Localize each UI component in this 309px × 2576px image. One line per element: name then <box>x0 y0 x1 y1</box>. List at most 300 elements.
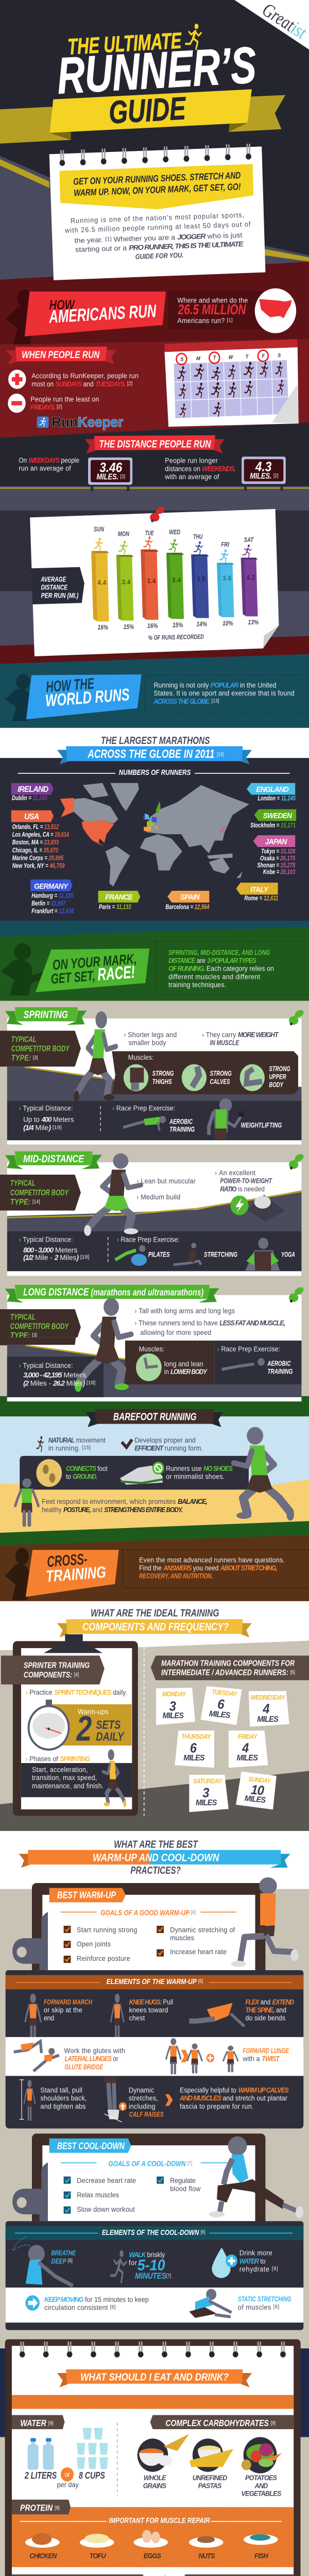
panel: protein: CHICKEN <box>29 2552 57 2560</box>
intro text: Running is one of the nation’s most popular sports, <box>71 211 244 225</box>
tag: France: FRANCE <box>105 893 133 902</box>
text: warm-up item text: end <box>44 2014 54 2022</box>
sticky note: Saturday: MILES <box>196 1799 217 1807</box>
panel: posture and calf raises: fascia to prepare for run. <box>180 2103 253 2110</box>
sticky note: Sunday: SUNDAY <box>248 1775 271 1785</box>
row: keep moving and stretching: circulation consistent <box>44 2303 108 2312</box>
tag: Ireland: IRELAND <box>18 785 48 794</box>
icon: green pin <box>289 1286 305 1302</box>
row: keep moving and stretching: STATIC STRETCHING <box>238 2295 291 2303</box>
item: breathe deep: [8] <box>68 2258 73 2264</box>
callout: 26.5 million: Americans run? <box>177 316 225 325</box>
sticky note: Sunday <box>236 1772 277 1809</box>
tag: Germany: Hamburg = 11,185 <box>31 892 74 900</box>
ribbon: Mid-distance <box>5 1151 102 1169</box>
panel: connects to ground: Runners use NO SHOES <box>166 1464 233 1472</box>
text: warm-up item text: knees toward <box>129 2006 168 2014</box>
text: mid-distance traits: RATIO is needed <box>220 1185 265 1193</box>
heading banner: On Your Mark <box>36 948 149 992</box>
ribbon: Guide <box>0 89 285 144</box>
panel: water: 2 LITERS <box>24 2470 57 2481</box>
panel: muscles: STRONG <box>152 1070 174 1077</box>
text: race prep <box>217 1345 293 1376</box>
silhouette: American runner <box>6 290 47 344</box>
tag: Ireland: Dublin = 11,245 <box>12 794 47 802</box>
tag: France: Paris = 31,133 <box>99 903 131 910</box>
text: weekends <box>164 456 235 481</box>
bar: Sunday: 16% <box>97 624 108 631</box>
section: running categories <box>0 1007 305 1346</box>
text: least popular day <box>30 395 99 411</box>
icon: green pin <box>289 1153 305 1170</box>
text: warm-up item text <box>44 2006 286 2022</box>
calendar <box>165 339 299 427</box>
panel: phases list: transition, max speed, <box>32 1774 97 1782</box>
tag: axis label <box>31 567 84 604</box>
sticky note: Wednesday <box>249 1691 289 1727</box>
section: warm-up and cool-down details <box>5 2003 303 2351</box>
heading banner: How The World Runs: WORLD RUNS <box>45 685 130 710</box>
clipboard: best cool-down <box>12 2133 265 2228</box>
text: sprint distance: (1/4 Mile) <box>23 1124 50 1132</box>
ribbon: Guide: GUIDE <box>108 90 187 130</box>
heading: numbers of runners: NUMBERS OF RUNNERS <box>119 768 191 777</box>
text: least popular day: People run the least on <box>30 395 99 403</box>
panel: complex carbohydrates: GRAINS <box>143 2482 166 2490</box>
bar: Tuesday: 16% <box>147 622 158 630</box>
panel: protein: NUTS <box>198 2552 215 2560</box>
callout: running types: SPRINTING, MID-DISTANCE, AND LONG <box>168 948 270 957</box>
tag: Italy: Rome = 12,611 <box>244 894 278 902</box>
text: sprint distance: [19] <box>53 1125 62 1130</box>
heading: goals of cool-down: GOALS OF A COOL-DOWN <box>108 2160 199 2168</box>
sticky note: Tuesday: 6 <box>217 1697 225 1712</box>
text: mid-distance range: › Typical Distance: <box>19 1235 73 1244</box>
panel: complex carbohydrates: VEGETABLES <box>242 2489 281 2498</box>
text: warm-up item text: THE SPINE, and <box>245 2006 286 2014</box>
panel: water: 8 CUPS <box>79 2470 105 2481</box>
text: natural movement: in running. <box>48 1444 80 1452</box>
figure: cool-down stretch <box>209 2137 303 2218</box>
callout: world intro: ACROSS THE GLOBE. <box>153 697 210 705</box>
icon: stopwatch <box>28 1700 69 1750</box>
panel: water: or <box>65 2470 71 2479</box>
figure: mid-distance runner <box>84 1154 141 1236</box>
tag: competitor body type: TYPICAL <box>10 1313 36 1322</box>
text: weekends: People run longer <box>165 456 218 465</box>
heading: warm-up and cool-down: PRACTICES? <box>130 1865 181 1876</box>
sticky note: Tuesday: TUESDAY <box>212 1688 238 1698</box>
ribbon: components and frequency <box>57 1619 252 1637</box>
sticky note: Thursday: 6 <box>190 1741 197 1756</box>
tag: competitor body type <box>0 1309 81 1345</box>
tag: England <box>247 783 296 802</box>
tag: Germany: Frankfurt = 12,438 <box>31 907 74 915</box>
panel: posture and calf raises: Especially helpful to WARM UP CALVES <box>180 2086 289 2094</box>
item: walk briskly: [7] <box>166 2273 171 2279</box>
text: running form: EFFICIENT running form. <box>134 1444 203 1452</box>
bar: Friday: 10% <box>222 619 233 627</box>
panel: glutes and lunge: GLUTE BRIDGE <box>65 2063 104 2071</box>
calendar: T <box>246 354 249 360</box>
calendar: T <box>213 355 217 361</box>
checklist: cool-down goals: blood flow <box>170 2184 201 2193</box>
figure: sprinter woman <box>103 1749 126 1807</box>
bar: Thursday <box>191 533 209 628</box>
bar: Sunday: SUN <box>94 526 104 533</box>
callout: running types: DISTANCE are 3 POPULAR TYPES <box>168 957 256 964</box>
bar: Thursday: 14% <box>197 620 207 628</box>
panel: muscles: STRONG <box>269 1064 290 1073</box>
panel: glutes and lunge: FORWARD LUNGE <box>243 2047 289 2055</box>
callout: running types <box>156 941 309 994</box>
text: distance range: › Typical Distance: <box>19 1362 73 1369</box>
text: distance range: (2 Miles - 26.2 Miles) <box>23 1379 84 1387</box>
panel: elements of the cool-down: ELEMENTS OF THE COOL-DOWN <box>102 2229 216 2237</box>
tag: competitor body type: COMPETITOR BODY <box>11 1044 70 1054</box>
panel: posture and calf raises <box>6 2076 303 2128</box>
heading banner: Cross-Training <box>26 1550 119 1597</box>
text: most popular days: [2] <box>127 381 132 387</box>
sticky note: Monday: MONDAY <box>162 1690 186 1698</box>
callout: world intro: States. It is one sport and exercise that is found <box>153 689 295 697</box>
panel: phases list: Start, acceleration, <box>32 1766 88 1774</box>
callout: 26.5 million <box>168 292 261 329</box>
sign: 3.46 miles: 3.46 <box>99 461 122 475</box>
heading banner: On Your Mark: ON YOUR MARK, <box>52 951 137 973</box>
section: when and how far Americans run <box>6 339 299 656</box>
callout: 26.5 million: [1] <box>227 317 233 323</box>
tag: competitor body type <box>0 1031 81 1066</box>
panel: muscles: STRONG <box>210 1070 232 1077</box>
checklist: warm-up goals: Dynamic stretching of <box>170 1926 235 1934</box>
text: race prep: › Race Prep Exercise: <box>217 1345 280 1353</box>
text: most popular days: most on SUNDAYS and TUESDAYS. <box>31 380 127 388</box>
heading: warm-up and cool-down: WARM-UP AND COOL-DOWN <box>93 1852 219 1864</box>
item: walk briskly: WALK briskly <box>129 2250 165 2259</box>
checklist: warm-up goals: Open joints <box>77 1940 111 1948</box>
panel: warm-ups daily: SETS <box>96 1718 121 1732</box>
intro text: the year. <box>74 236 99 245</box>
panel: phases list <box>21 1763 132 1797</box>
panel: long distance details <box>0 1298 301 1401</box>
callout: running types: different muscles and different <box>168 973 260 980</box>
sticky note: Saturday: SATURDAY <box>193 1777 222 1785</box>
tag: Germany: GERMANY <box>34 882 68 891</box>
heading banner: How The World Runs: HOW THE <box>45 675 95 696</box>
text: warm-up item text: do side bends <box>245 2014 285 2022</box>
panel: complex carbohydrates <box>138 2415 294 2498</box>
tag: competitor body type: TYPE: <box>10 1331 32 1340</box>
ribbon: Barefoot Running: BAREFOOT RUNNING <box>113 1412 197 1423</box>
sign: 4.3 miles: 4.3 <box>255 460 272 474</box>
ribbon: The Distance People Run: THE DISTANCE PEOPLE RUN <box>99 438 211 450</box>
bar: Saturday: SAT <box>244 536 254 544</box>
text: sprinter traits: › They carry MORE WEIGHT <box>202 1031 279 1039</box>
text: distance range: 3,000 - 42,195 Meters <box>23 1371 87 1379</box>
intro banner: GET ON YOUR RUNNING SHOES. STRETCH AND <box>73 170 241 187</box>
row: keep moving and stretching: KEEP MOVING for 15 minutes to keep <box>44 2295 149 2303</box>
ribbon: Long distance <box>5 1285 219 1302</box>
checklist: cool-down goals: Relax muscles <box>77 2191 119 2199</box>
text: mid-distance traits: › An excellent <box>215 1168 255 1177</box>
heading: warm-up and cool-down <box>19 1839 290 1876</box>
text: balance: healthy POSTURE, and STRENGTHENS ENTIRE BODY. <box>42 1505 183 1514</box>
callout: running types: OF RUNNING. Each category relies on <box>168 964 274 973</box>
tag: marathon training components: INTERMEDIATE / ADVANCED RUNNERS: <box>161 1668 306 1677</box>
text: phases of sprinting: › Phases of SPRINTING <box>26 1755 90 1762</box>
intro text: JOGGER who is just <box>177 231 237 241</box>
heading banner: How Americans Run: HOW <box>49 298 76 312</box>
heading banner: Cross-Training: CROSS- <box>46 1551 88 1571</box>
tag: axis label: PER RUN (MI.) <box>41 591 79 599</box>
tag: USA: USA <box>24 812 39 821</box>
item: walk briskly <box>111 2250 171 2282</box>
sign: 4.3 miles: MILES. <box>250 471 275 481</box>
silhouette: sprinter start <box>1 943 48 995</box>
bar: Saturday: 13% <box>248 619 259 626</box>
text: weekends: with an average of <box>164 473 219 481</box>
bar: Saturday: 4.2 <box>246 574 255 581</box>
sticky note: Thursday <box>175 1731 214 1768</box>
text: long distance traits: › Tall with long arms and long legs <box>134 1307 235 1315</box>
tag: England: ENGLAND <box>256 786 289 794</box>
tag: competitor body type: TYPE: <box>11 1054 33 1063</box>
tag: Germany <box>30 879 74 915</box>
ribbon: The Distance People Run <box>85 435 225 453</box>
text: warm-up item text: or skip at the <box>44 2006 82 2014</box>
icon: plus <box>8 370 26 389</box>
heading banner: How The World Runs <box>26 674 142 719</box>
bar: Saturday <box>241 536 259 626</box>
heading banner: On Your Mark: GET SET, <box>50 968 96 987</box>
sticky note: Monday: MILES <box>163 1711 184 1720</box>
heading: largest marathons: THE LARGEST MARATHONS <box>101 735 210 747</box>
row: keep moving and stretching: of muscles <box>238 2303 271 2311</box>
panel: warm-ups daily: 2 <box>76 1708 92 1748</box>
sticky note: Friday: FRIDAY <box>238 1733 258 1740</box>
sticky note: Monday: 3 <box>169 1700 176 1714</box>
ribbon: components and frequency: COMPONENTS AND FREQUENCY? <box>82 1621 229 1633</box>
panel: water: WATER <box>20 2418 49 2428</box>
text: sprint race prep: TRAINING <box>169 1125 195 1133</box>
logo: RunKeeper: RunKeeper <box>52 414 123 430</box>
item: drink water: Drink more <box>239 2249 272 2257</box>
tag: England: London = 11,245 <box>258 794 296 802</box>
ribbon: When People Run <box>6 347 116 364</box>
tag: USA: Los Angeles, CA = 19,614 <box>12 831 69 838</box>
ribbon: Mid-distance: MID-DISTANCE <box>23 1154 84 1165</box>
tag: Germany: Berlin = 32,997 <box>31 900 66 907</box>
sticky note: Friday: MILES <box>237 1754 258 1762</box>
heading: goals of warm-up <box>61 1909 236 1918</box>
heading banner: How Americans Run: AMERICANS RUN <box>48 301 157 327</box>
panel: muscles: THIGHS <box>152 1077 172 1086</box>
checklist: cool-down goals: Decrease heart rate <box>77 2177 136 2184</box>
sticky note: Monday <box>156 1688 195 1725</box>
text: distance range: [19] <box>87 1380 95 1386</box>
sticky note: Saturday: 3 <box>202 1786 210 1801</box>
ribbon: what should I eat <box>57 2369 252 2387</box>
checklist: cool-down goals: Regulate <box>170 2177 196 2184</box>
panel: complex carbohydrates: PASTAS <box>198 2482 221 2490</box>
text: least popular day: [2] <box>57 404 62 410</box>
bar: Monday: MON <box>118 530 129 538</box>
panel: protein: [9] <box>55 2505 60 2511</box>
clipboard: sprinter training <box>13 1634 138 1816</box>
text: weekdays: run an average of <box>19 464 71 472</box>
tag: sprinter training components: COMPONENTS: <box>24 1670 80 1680</box>
item: knee hugs: KNEE HUGS: Pull <box>129 1998 173 2006</box>
bar: Wednesday <box>166 528 184 629</box>
sticky note: Tuesday: MILES <box>209 1709 231 1720</box>
panel: complex carbohydrates: AND <box>254 2482 268 2490</box>
tag: Japan: Tokyo = 33,328 <box>261 848 295 855</box>
text: running form <box>122 1436 203 1452</box>
text: sprint distance <box>19 1104 74 1132</box>
bar: Sunday <box>91 526 109 631</box>
text: mid-distance range: 800 - 3,000 Meters <box>23 1246 78 1254</box>
tag: USA: Boston, MA = 23,833 <box>12 839 59 846</box>
item: drink water <box>212 2247 278 2278</box>
text: natural movement <box>37 1436 106 1452</box>
tag: sprinter training components: SPRINTER TRAINING <box>24 1661 90 1670</box>
figure: sprinter <box>74 1011 116 1103</box>
text: balance <box>42 1498 207 1514</box>
panel: protein <box>12 2500 294 2567</box>
text: muscles: long and lean <box>164 1360 203 1368</box>
text: sprint techniques: › Practice SPRINT TECHNIQUES daily. <box>26 1688 127 1696</box>
callout: cross-training intro <box>123 1550 309 1588</box>
text: mid-distance race prep: YOGA <box>281 1250 295 1259</box>
panel: muscles: BODY <box>269 1081 284 1089</box>
callout: cross-training intro: RECOVERY, AND NUTRITION. <box>139 1572 213 1580</box>
item: breathe deep: DEEP <box>51 2257 68 2265</box>
tag: sprinter training components <box>1 1656 105 1684</box>
text: most popular days: According to RunKeeper, people run <box>31 372 139 380</box>
text: mid-distance range: (1/2 Mile - 2 Miles) <box>23 1253 78 1261</box>
panel: muscles <box>112 1051 298 1094</box>
panel: posture and calf raises: Dynamic <box>129 2086 154 2094</box>
heading banner: On Your Mark: RACE! <box>97 962 135 984</box>
ribbon: When People Run: WHEN PEOPLE RUN <box>22 349 100 360</box>
panel: glutes and lunge: Work the glutes with <box>64 2047 125 2055</box>
sticky note: Saturday <box>189 1775 229 1812</box>
item: walk briskly: for <box>129 2259 138 2267</box>
calendar: W <box>229 354 233 361</box>
tag: USA: Orlando, FL = 13,512 <box>12 823 59 831</box>
panel: posture and calf raises: Stand tall, pull <box>40 2086 82 2094</box>
ribbon: across the globe <box>57 746 252 765</box>
bar: Monday <box>116 530 134 631</box>
panel: intro notebook <box>49 144 265 280</box>
item: forward march: FORWARD MARCH <box>44 1998 92 2006</box>
checklist: warm-up goals: Increase heart rate <box>170 1948 227 1956</box>
tag: marathon training components <box>151 1656 309 1680</box>
panel: elements of the cool-down: [6] <box>201 2229 205 2235</box>
tag: competitor body type: TYPE: <box>10 1198 32 1207</box>
text: long distance traits: allowing for more speed <box>140 1328 211 1336</box>
chart: average distance per run <box>30 505 279 656</box>
tag: axis label: DISTANCE <box>41 583 68 591</box>
text: weekdays: On WEEKDAYS people <box>19 456 79 464</box>
section: nutrition notebook <box>5 2342 301 2576</box>
text: muscles: in LOWER BODY <box>164 1368 208 1376</box>
tag: Spain: SPAIN <box>180 893 200 902</box>
tag: competitor body type: COMPETITOR BODY <box>10 1322 70 1331</box>
text: running form: Develops proper and <box>134 1436 196 1444</box>
panel: protein: PROTEIN <box>20 2503 57 2513</box>
item: walk briskly: MINUTES <box>135 2272 170 2281</box>
heading: goals of warm-up: GOALS OF A GOOD WARM-UP <box>100 1909 204 1918</box>
text: race prep: TRAINING <box>267 1367 293 1376</box>
ribbon: Long distance: LONG DISTANCE (marathons and ultramarathons) <box>23 1287 203 1298</box>
panel: balanced meals pie <box>182 2574 294 2576</box>
panel: posture and calf raises: shoulders back, <box>40 2094 87 2102</box>
row: keep moving and stretching: [8] <box>273 2304 279 2310</box>
tag: Ireland <box>11 783 54 802</box>
panel: mid-distance <box>0 1151 305 1276</box>
text: sprint race prep: AEROBIC <box>169 1117 193 1125</box>
panel: warm-ups daily <box>52 1704 132 1748</box>
sign: 3.46 miles: MILES. <box>96 472 122 482</box>
row: keep moving and stretching <box>6 2287 303 2323</box>
panel: elements of the warm-up: ELEMENTS OF THE WARM-UP <box>107 1978 210 1986</box>
panel: posture and calf raises: and tighten abs <box>40 2103 86 2110</box>
intro banner <box>60 164 253 209</box>
panel: elements of the warm-up: [6] <box>198 1978 203 1985</box>
item: knee hugs <box>111 1994 173 2041</box>
text: sprint distance: › Typical Distance: <box>19 1104 73 1112</box>
panel: warm-ups daily: Warm-ups <box>78 1708 109 1716</box>
callout: 26.5 million: Where and when do the <box>177 296 248 304</box>
text: sprinter traits: smaller body <box>128 1039 166 1047</box>
tag: USA: Chicago, IL = 35,670 <box>12 846 58 854</box>
tag: marathon training components: [5] <box>290 1670 295 1675</box>
panel: fats <box>12 2574 148 2576</box>
ribbon: Sprinting: SPRINTING <box>24 1009 68 1021</box>
text: balance: Feet respond to environment, which promotes BALANCE, <box>42 1498 207 1505</box>
tag: axis label: AVERAGE <box>40 575 66 583</box>
panel: connects to ground: to GROUND. <box>66 1472 97 1480</box>
tag: France <box>98 891 140 910</box>
tag: Italy <box>236 883 278 902</box>
ribbon: Sprinting <box>5 1007 87 1025</box>
tag: Japan: Shonan = 15,278 <box>257 861 295 869</box>
tag: competitor body type: [14] <box>32 1199 40 1205</box>
sign: 4.3 miles: [2] <box>273 473 278 479</box>
text: race prep: AEROBIC <box>267 1360 291 1367</box>
tag: Spain <box>165 891 210 910</box>
item: walk briskly: 5-10 <box>138 2257 165 2274</box>
sticky note: Thursday: THURSDAY <box>181 1733 211 1740</box>
sticky note: Wednesday: MILES <box>257 1715 279 1724</box>
item: breathe deep: BREATHE <box>51 2249 76 2257</box>
text: mid-distance race prep: STRETCHING <box>204 1250 237 1259</box>
bar: Sunday: 4.4 <box>97 579 107 586</box>
panel: protein: FISH <box>254 2552 268 2560</box>
text: long distance traits <box>134 1307 285 1336</box>
ribbon: across the globe: [13] <box>217 752 224 758</box>
panel: elements of the cool-down <box>6 2221 303 2330</box>
text: sprint distance: Up to 400 Meters <box>23 1115 74 1124</box>
clipboard: best warm-up <box>12 1883 265 1977</box>
sign: 4.3 miles <box>242 456 286 490</box>
panel: long distance header <box>0 1285 305 1346</box>
heading banner: How Americans Run <box>25 292 166 336</box>
tag: USA: New York, NY = 46,759 <box>12 862 65 870</box>
text: most popular days <box>31 372 139 388</box>
